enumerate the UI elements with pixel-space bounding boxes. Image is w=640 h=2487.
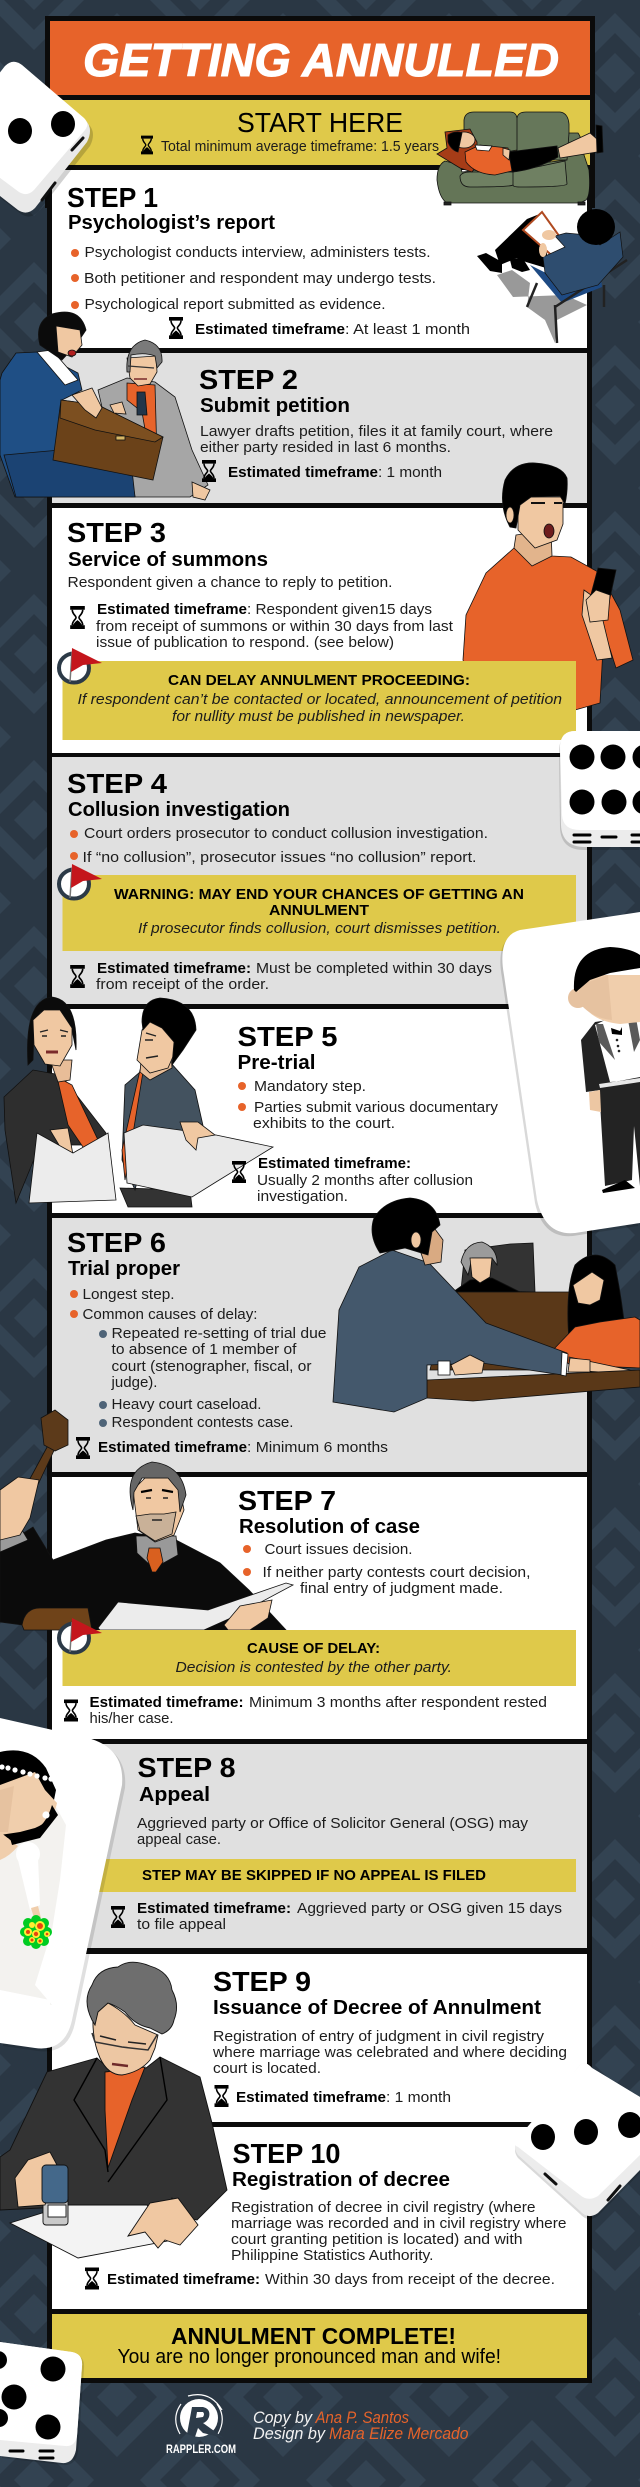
- step 8 description: Aggrieved party or Office of Solicitor General (OSG) may: [137, 1816, 529, 1832]
- logo: Rappler: [166, 2395, 236, 2456]
- step 8 timeframe: Estimated timeframe:: [137, 1901, 291, 1917]
- credits: Copy by: [253, 2408, 313, 2427]
- step 4 subheading: Collusion investigation: [68, 799, 290, 821]
- icon: red flag: [59, 1618, 102, 1652]
- step 10 timeframe: Within 30 days from receipt of the decree.: [265, 2272, 555, 2288]
- step 6 text: [67, 1227, 388, 1459]
- start here heading: START HERE: [237, 107, 403, 138]
- credits: [253, 2408, 468, 2443]
- step 3 heading: STEP 3: [67, 517, 166, 548]
- icon: man in orange shirt with phone: [463, 463, 633, 710]
- step 3 text: [59, 517, 576, 740]
- step 6 timeframe: Estimated timeframe: [98, 1440, 247, 1456]
- step 7 timeframe: Minimum 3 months after respondent rested: [249, 1695, 547, 1711]
- step 8 heading: STEP 8: [138, 1752, 236, 1783]
- step 5 bullets: Mandatory step.: [254, 1079, 366, 1095]
- icon: courtroom scene with lawyer, judge and witness: [333, 1198, 640, 1412]
- step 2 description: either party resided in last 6 months.: [200, 440, 451, 456]
- step 9 text: [212, 1966, 567, 2107]
- step 8 description: [137, 1816, 529, 1848]
- step 9 description: court is located.: [213, 2061, 321, 2077]
- step 5 bullets: Parties submit various documentary: [254, 1100, 499, 1116]
- step 3 timeframe: : Respondent given15 days: [247, 602, 432, 618]
- callout: warning: [62, 875, 576, 951]
- step 9 description: [212, 2029, 567, 2077]
- title: GETTING ANNULLED: [83, 34, 559, 86]
- step 6 bullets: to absence of 1 member of: [112, 1342, 298, 1358]
- panel: groom card: [500, 912, 640, 1236]
- callout: can delay: [62, 661, 576, 740]
- icon: hourglass: [202, 460, 216, 482]
- step 3 timeframe: from receipt of summons or within 30 days from last: [96, 619, 453, 635]
- step 3 timeframe: [96, 602, 453, 651]
- step 9 timeframe: : 1 month: [386, 2090, 451, 2106]
- icon: hourglass: [70, 965, 85, 988]
- step 6 bullets: Longest step.: [82, 1287, 174, 1303]
- step 6 subheading: Trial proper: [68, 1258, 180, 1280]
- icon: die bottom right: [515, 2063, 640, 2219]
- step 6 bullets: judge).: [110, 1375, 158, 1391]
- step 8 timeframe: [137, 1901, 562, 1933]
- step 9 subheading: Issuance of Decree of Annulment: [213, 1997, 541, 2019]
- annulment complete banner: You are no longer pronounced man and wife!: [118, 2346, 501, 2368]
- icon: hourglass: [70, 606, 85, 629]
- step 1 text: [67, 182, 470, 339]
- step 4 bullets: Court orders prosecutor to conduct collusion investigation.: [84, 826, 488, 842]
- step 5 heading: STEP 5: [238, 1021, 338, 1052]
- step 10 heading: STEP 10: [232, 2138, 340, 2169]
- callout: step may be skipped: [62, 1859, 576, 1892]
- step 6 bullets: Repeated re-setting of trial due: [112, 1326, 326, 1342]
- step 2 timeframe: [228, 465, 442, 481]
- step 10 description: Philippine Statistics Authority.: [231, 2248, 434, 2264]
- step 5 text: [232, 1021, 499, 1205]
- step 9 timeframe: [236, 2090, 451, 2106]
- step 4 timeframe: from receipt of the order.: [96, 977, 269, 993]
- credits: Mara Elize Mercado: [329, 2424, 468, 2443]
- icon: red flag: [59, 648, 102, 682]
- step 7 bullets: Court issues decision.: [264, 1542, 412, 1558]
- step 7 heading: STEP 7: [238, 1485, 336, 1516]
- step 2 timeframe: : 1 month: [378, 465, 442, 481]
- step 5 bullets: exhibits to the court.: [253, 1116, 395, 1132]
- step 8 text: [62, 1752, 576, 1933]
- step 6 bullets: Common causes of delay:: [82, 1307, 258, 1323]
- step 5 timeframe: Usually 2 months after collusion: [257, 1173, 473, 1189]
- icon: woman in black suit stamping document: [0, 1962, 227, 2258]
- step 3 subheading: Service of summons: [68, 549, 268, 571]
- step 7 timeframe: [90, 1695, 547, 1727]
- icon: woman and man lawyers with briefcase: [0, 312, 210, 500]
- start here heading: [141, 107, 439, 155]
- step 4 bullets: If “no collusion”, prosecutor issues “no collusion” report.: [82, 850, 476, 866]
- panel: bride card: [0, 1718, 125, 2051]
- step 10 description: [231, 2200, 566, 2264]
- callout: warning: WARNING: MAY END YOUR CHANCES OF GETTING AN: [114, 886, 524, 903]
- icon: couch with woman lying down: [437, 112, 603, 205]
- step 7 bullets: [243, 1542, 530, 1597]
- step 10 description: court granting petition is located) and with: [231, 2232, 522, 2248]
- total timeframe: Total minimum average timeframe: 1.5 years: [161, 138, 439, 155]
- step 7 timeframe: Estimated timeframe:: [90, 1695, 244, 1711]
- callout: cause of delay: [62, 1630, 576, 1686]
- step 6 heading: STEP 6: [67, 1227, 166, 1258]
- callout: cause of delay: CAUSE OF DELAY:: [247, 1640, 380, 1657]
- step 4 timeframe: Estimated timeframe:: [97, 961, 251, 977]
- step 1 bullets: Both petitioner and respondent may undergo tests.: [84, 271, 436, 287]
- step 1 timeframe: [195, 322, 470, 338]
- icon: hourglass: [169, 317, 183, 339]
- step 10 text: [85, 2138, 566, 2290]
- icon: judge with gavel and book: [0, 1410, 293, 1630]
- icon: die bottom left: [0, 2342, 84, 2465]
- step 10 timeframe: [107, 2272, 555, 2288]
- step 2 subheading: Submit petition: [200, 395, 350, 417]
- step 6 bullets: Heavy court caseload.: [112, 1397, 262, 1413]
- step 4 text: [59, 768, 576, 993]
- callout: can delay: for nullity must be published in newspaper.: [172, 708, 465, 725]
- annulment complete banner: ANNULMENT COMPLETE!: [171, 2323, 456, 2349]
- step 3 description: Respondent given a chance to reply to petition.: [68, 575, 392, 591]
- step 6 bullets: court (stenographer, fiscal, or: [112, 1359, 312, 1375]
- step 8 description: appeal case.: [137, 1832, 221, 1848]
- step 10 subheading: Registration of decree: [232, 2169, 450, 2191]
- icon: die right with six pips: [559, 731, 640, 850]
- step 1 bullets: Psychologist conducts interview, administers tests.: [84, 245, 430, 261]
- step 5 bullets: [238, 1079, 499, 1132]
- step 10 description: marriage was recorded and in civil registry where: [231, 2216, 566, 2232]
- step 10 description: Registration of decree in civil registry (where: [231, 2200, 536, 2216]
- logo: Rappler: RAPPLER.COM: [166, 2442, 236, 2456]
- icon: hourglass: [232, 1161, 246, 1183]
- icon: hourglass: [141, 136, 153, 154]
- step 2 description: Lawyer drafts petition, files it at family court, where: [200, 424, 553, 440]
- step 1 subheading: Psychologist’s report: [68, 212, 275, 234]
- step 7 bullets: final entry of judgment made.: [300, 1581, 503, 1597]
- step 5 timeframe: investigation.: [257, 1189, 348, 1205]
- step 1 bullets: Psychological report submitted as evidence.: [84, 297, 386, 313]
- callout: warning: ANNULMENT: [269, 902, 369, 919]
- step 4 timeframe: Must be completed within 30 days: [256, 961, 492, 977]
- step 3 timeframe: issue of publication to respond. (see below): [96, 635, 394, 651]
- callout: cause of delay: Decision is contested by the other party.: [176, 1659, 452, 1676]
- icon: red flag: [59, 864, 102, 898]
- icon: hourglass: [111, 1906, 125, 1928]
- step 2 heading: STEP 2: [199, 364, 298, 395]
- step 2 timeframe: Estimated timeframe: [228, 465, 378, 481]
- icon: psychologist seen from above: [477, 209, 627, 343]
- step 2 description: [200, 424, 553, 456]
- icon: hourglass: [85, 2268, 99, 2290]
- step 5 subheading: Pre-trial: [238, 1052, 316, 1074]
- step 9 timeframe: Estimated timeframe: [236, 2090, 386, 2106]
- icon: hourglass: [214, 2085, 228, 2107]
- step 2 text: [199, 364, 553, 482]
- step 8 timeframe: to file appeal: [137, 1917, 226, 1933]
- step 6 timeframe: [98, 1440, 388, 1456]
- step 5 timeframe: Estimated timeframe:: [258, 1156, 411, 1172]
- step 6 bullets: Respondent contests case.: [112, 1415, 294, 1431]
- step 1 bullets: [71, 245, 436, 313]
- step 5 timeframe: [257, 1156, 473, 1205]
- step 8 timeframe: Aggrieved party or OSG given 15 days: [297, 1901, 562, 1917]
- step 4 bullets: [70, 826, 488, 866]
- icon: man and woman holding documents: [4, 997, 273, 1207]
- step 8 subheading: Appeal: [139, 1784, 210, 1806]
- step 6 timeframe: : Minimum 6 months: [247, 1440, 388, 1456]
- icon: groom in tuxedo: [568, 947, 640, 1193]
- callout: step may be skipped: STEP MAY BE SKIPPED IF NO APPEAL IS FILED: [142, 1867, 486, 1884]
- step 7 timeframe: his/her case.: [90, 1711, 174, 1727]
- step 3 timeframe: Estimated timeframe: [97, 602, 247, 618]
- icon: hourglass: [64, 1700, 78, 1722]
- icon: die top left: [0, 62, 93, 217]
- callout: can delay: If respondent can’t be contacted or located, announcement of petition: [78, 691, 562, 708]
- step 9 description: Registration of entry of judgment in civil registry: [213, 2029, 545, 2045]
- step 7 bullets: If neither party contests court decision,: [262, 1565, 530, 1581]
- annulment complete banner: [118, 2323, 501, 2368]
- callout: can delay: CAN DELAY ANNULMENT PROCEEDING:: [168, 672, 470, 689]
- icon: bride with veil and bouquet: [0, 1750, 66, 2040]
- callout: warning: If prosecutor finds collusion, court dismisses petition.: [138, 920, 501, 937]
- step 7 text: [59, 1485, 576, 1727]
- credits: Design by: [253, 2424, 326, 2443]
- step 6 bullets: [70, 1287, 326, 1431]
- step 4 heading: STEP 4: [67, 768, 167, 799]
- step 4 timeframe: [96, 961, 492, 993]
- step 9 description: where marriage was celebrated and where deciding: [212, 2045, 567, 2061]
- step 9 heading: STEP 9: [213, 1966, 311, 1997]
- icon: hourglass: [76, 1437, 90, 1459]
- step 1 heading: STEP 1: [67, 182, 158, 213]
- step 10 timeframe: Estimated timeframe:: [107, 2272, 260, 2288]
- credits: Ana P. Santos: [315, 2408, 409, 2427]
- step 1 timeframe: Estimated timeframe: [195, 322, 345, 338]
- step 7 subheading: Resolution of case: [239, 1516, 420, 1538]
- step 1 timeframe: : At least 1 month: [345, 322, 470, 338]
